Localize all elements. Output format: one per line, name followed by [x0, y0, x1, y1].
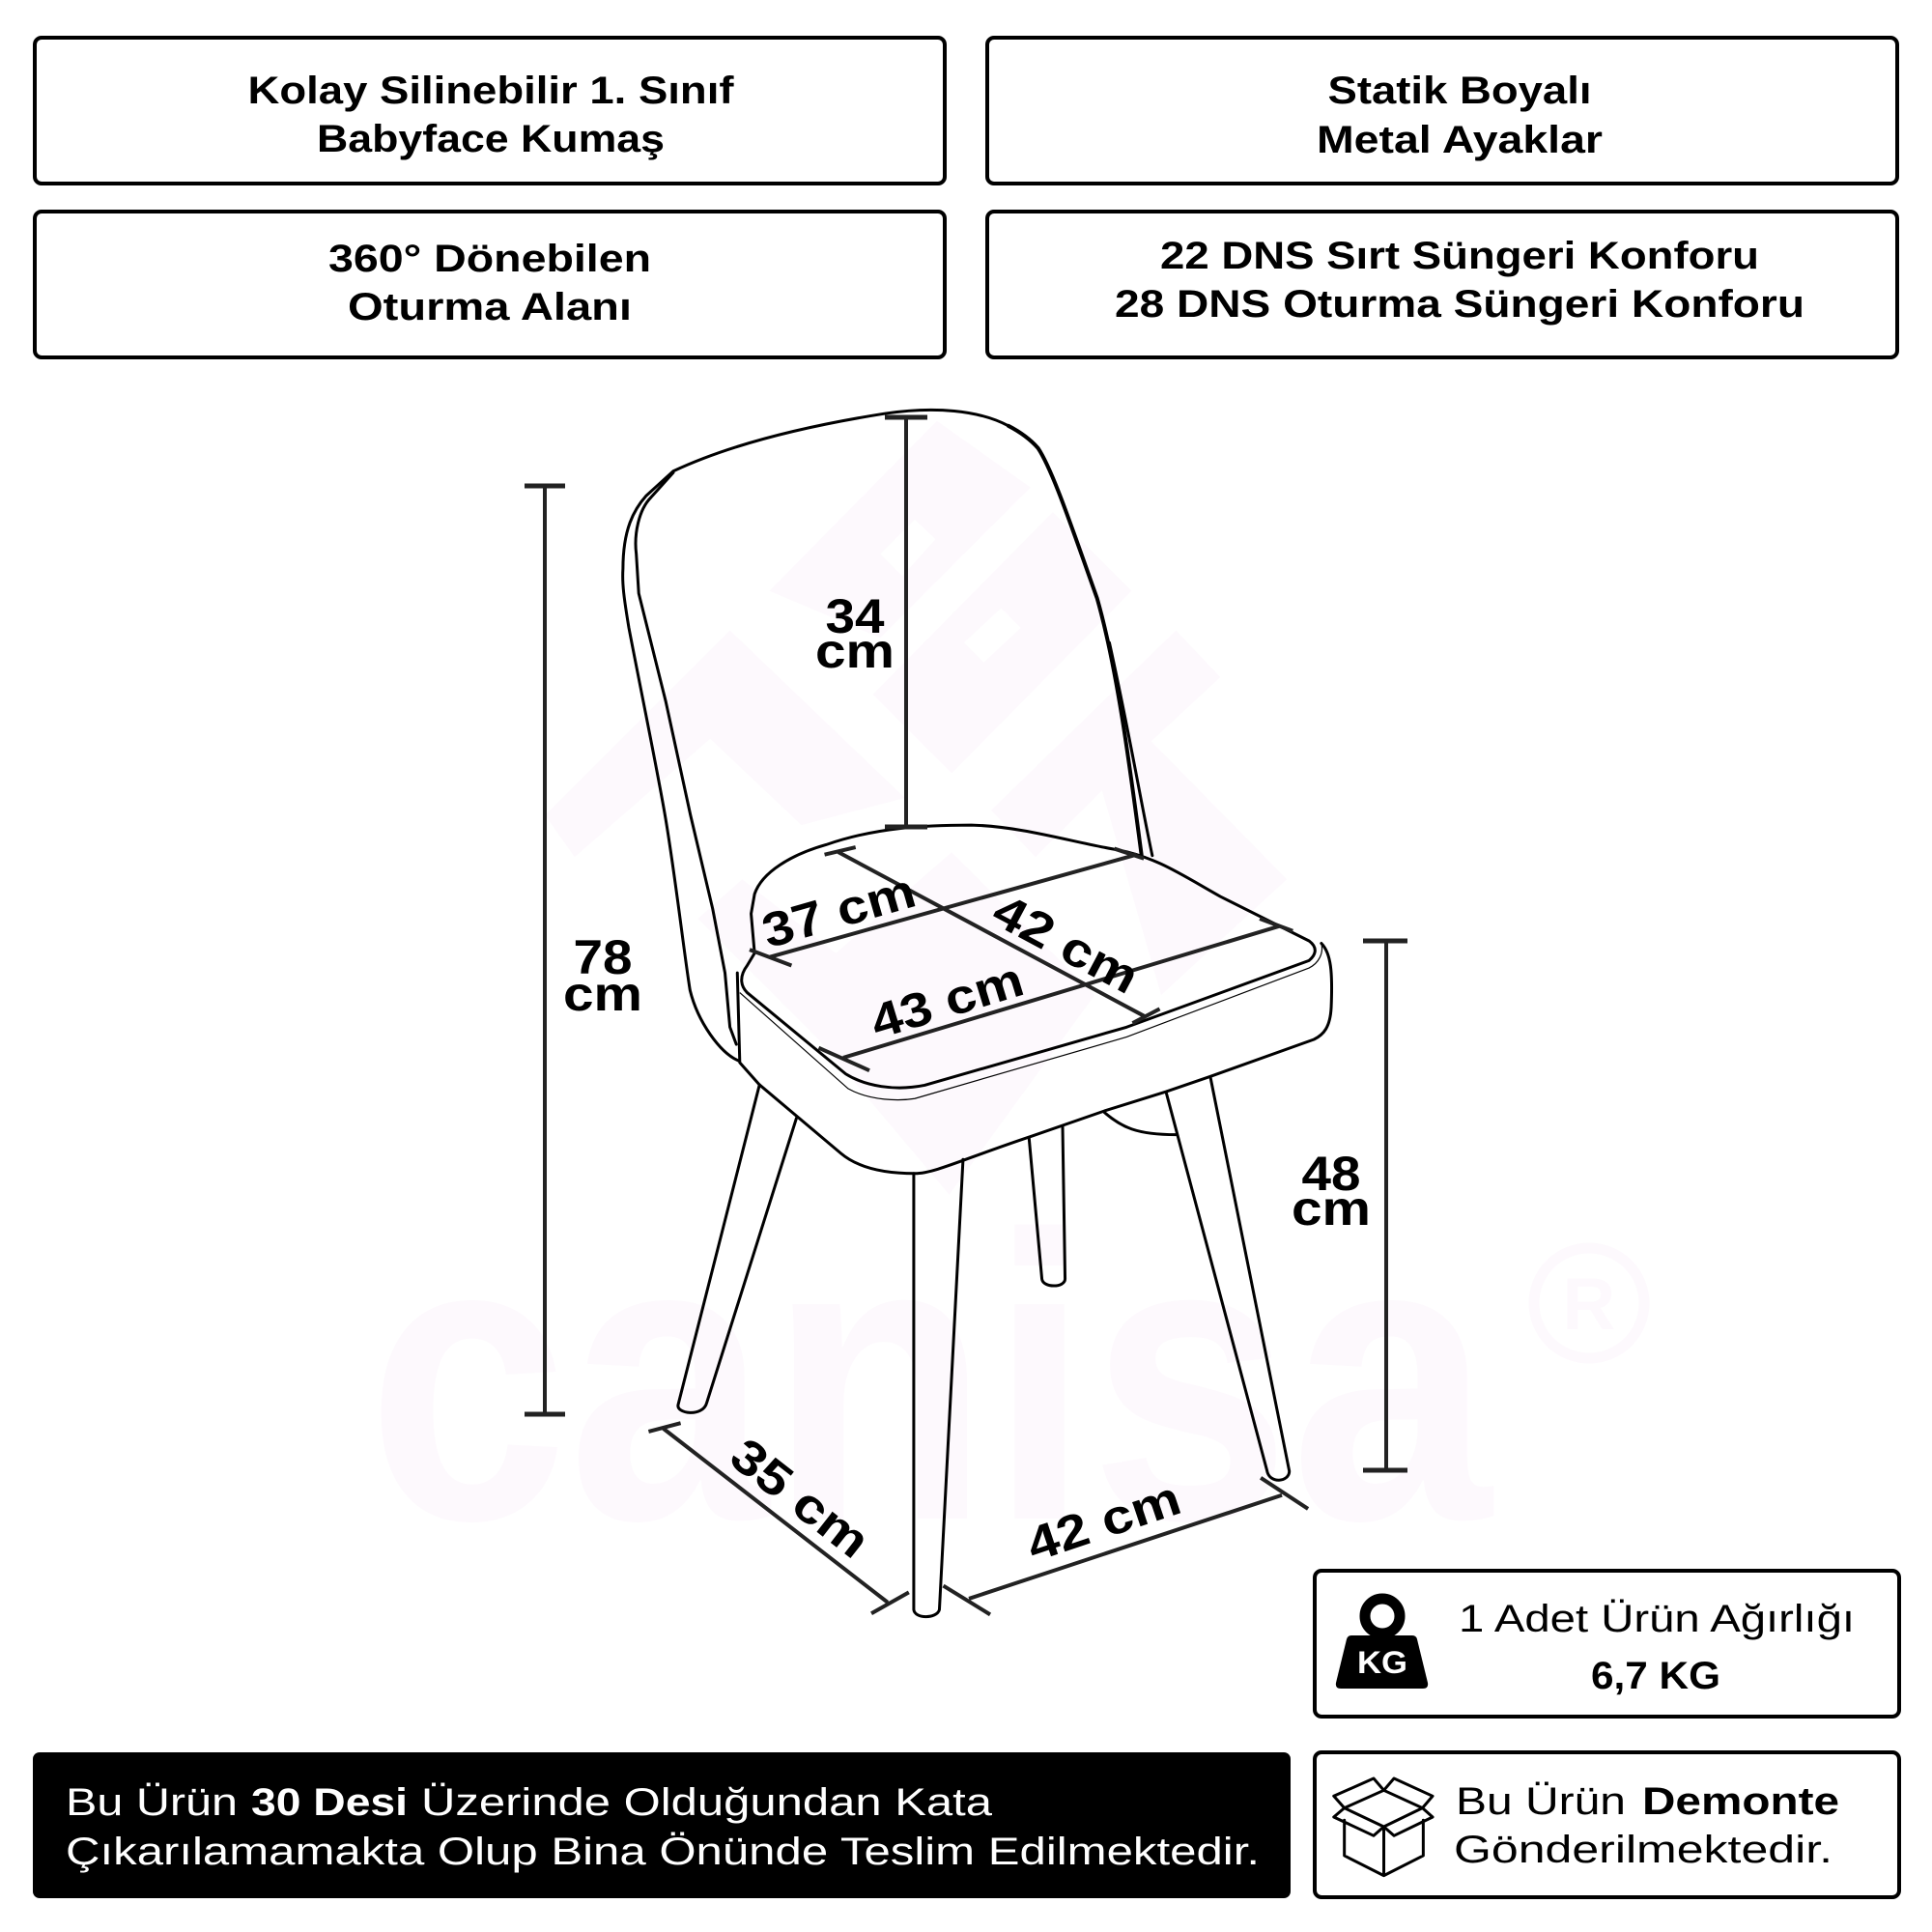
icon: kg weight — [1336, 1599, 1428, 1689]
seat piping — [740, 944, 1322, 1100]
chair back outer outline — [623, 410, 1009, 1061]
icon: kg weight: KG — [1357, 1645, 1407, 1680]
feature box: sponge comfort: 22 DNS Sırt Süngeri Konforu — [1160, 235, 1759, 277]
dimension: total height 78 cm — [525, 486, 642, 1414]
seat cushion top — [742, 825, 1315, 1088]
watermark: diamond logo — [545, 421, 1287, 1195]
label: 35 cm: 35 cm — [721, 1428, 880, 1569]
feature box: fabric: Babyface Kumaş — [317, 118, 665, 160]
notice: delivery note — [33, 1752, 1291, 1898]
chair: legs — [678, 1077, 1290, 1617]
feature box: metal legs — [987, 38, 1897, 184]
dimension: seat height 48 cm: 48 — [1302, 1147, 1360, 1201]
label: 43 cm: 43 cm — [865, 952, 1030, 1049]
notice: delivery note: Üzerinde Olduğundan Kata — [421, 1781, 993, 1824]
dimension: total height 78 cm: 78 — [574, 930, 632, 984]
notice: delivery note: 30 Desi — [251, 1781, 408, 1824]
label: 37 cm: 37 cm — [756, 864, 922, 958]
dimension: seat height 48 cm: cm — [1292, 1181, 1371, 1236]
feature box: fabric: Kolay Silinebilir 1. Sınıf — [247, 70, 734, 112]
feature box: sponge comfort: 28 DNS Oturma Süngeri Konforu — [1115, 283, 1804, 326]
weight box — [1315, 1571, 1899, 1717]
dimension: total height 78 cm: cm — [563, 967, 642, 1021]
weight box: 1 Adet Ürün Ağırlığı — [1459, 1598, 1855, 1640]
disassembled box: Bu Ürün — [1456, 1780, 1626, 1823]
weight box: 6,7 KG — [1591, 1655, 1720, 1697]
feature box: swivel: Oturma Alanı — [348, 286, 632, 328]
icon: cardboard box — [1334, 1778, 1433, 1876]
disassembled box: Gönderilmektedir. — [1454, 1829, 1833, 1871]
label: seat depth 42 cm: 42 cm — [984, 883, 1148, 1005]
notice: delivery note: Çıkarılamamakta Olup Bina Önünde Teslim Edilmektedir. — [66, 1831, 1260, 1873]
dimension: back height 34 cm: cm — [815, 624, 895, 678]
chair back inner lines — [636, 472, 1152, 1044]
watermark: brand name: R — [1563, 1264, 1615, 1346]
disassembled box: Demonte — [1642, 1780, 1839, 1823]
feature box: swivel: 360° Dönebilen — [328, 238, 651, 280]
feature box: swivel — [35, 212, 945, 357]
chair back right edge — [1009, 426, 1142, 855]
watermark: brand name: canisa — [367, 1152, 1493, 1605]
feature box: metal legs: Metal Ayaklar — [1317, 119, 1603, 161]
chair: back and seat — [623, 410, 1332, 1174]
disassembled box — [1315, 1752, 1899, 1897]
dimension: seat height 48 cm — [1292, 941, 1407, 1470]
dimension lines: seat — [750, 847, 1293, 1070]
label: floor 42 cm: 42 cm — [1020, 1470, 1187, 1573]
dimension lines: floor — [648, 1423, 1308, 1614]
dimension: back height 34 cm: 34 — [825, 589, 885, 643]
feature box: metal legs: Statik Boyalı — [1327, 70, 1592, 112]
feature box: sponge comfort — [987, 212, 1897, 357]
feature box: fabric — [35, 38, 945, 184]
dimension: back height 34 cm — [815, 417, 927, 827]
seat body — [737, 944, 1332, 1174]
notice: delivery note: Bu Ürün — [66, 1781, 238, 1824]
